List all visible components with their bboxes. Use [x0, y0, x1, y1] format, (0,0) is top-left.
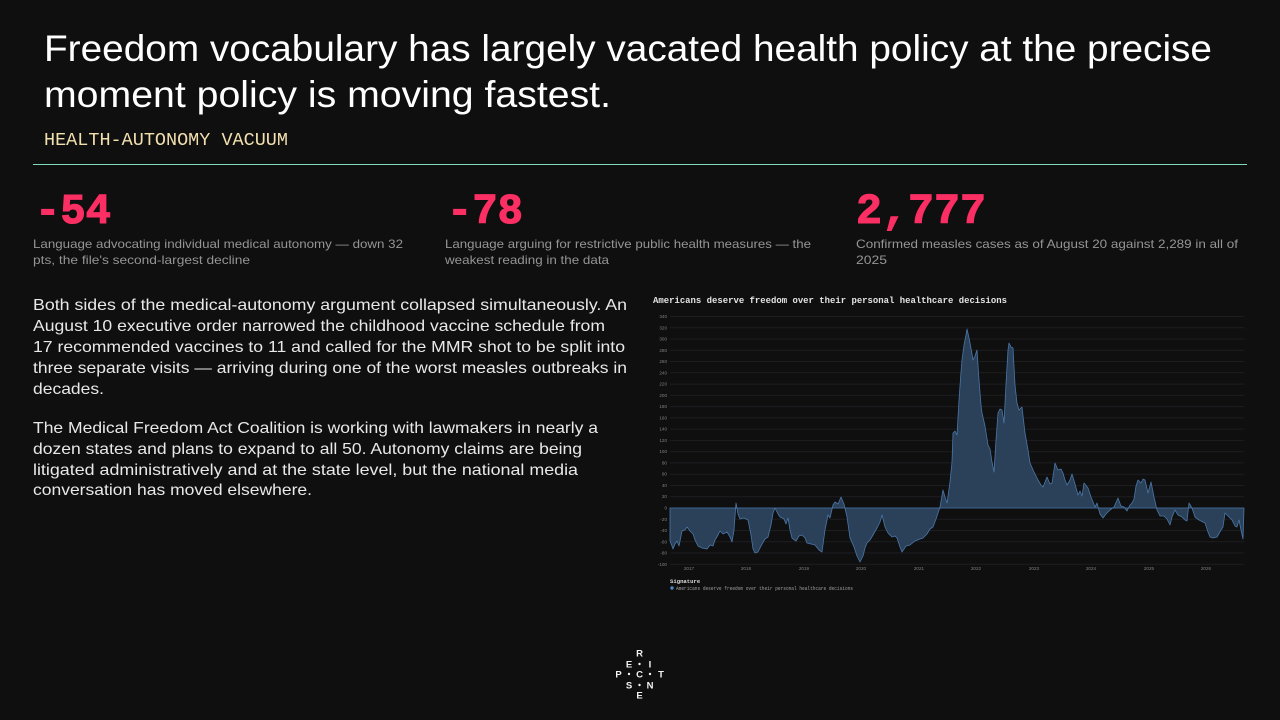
stat: -78: Language arguing for restrictive public health measures — the: [445, 237, 811, 251]
x axis labels: 2022: [971, 566, 982, 571]
y axis labels: 80: [662, 460, 667, 465]
stat: 2,777: [856, 187, 1239, 267]
stat: -78: [444, 187, 811, 267]
y axis labels: 40: [662, 483, 667, 488]
body paragraph 1: 17 recommended vaccines to 11 and called for the MMR shot to be split into: [33, 339, 625, 356]
logo: Precise: P: [615, 670, 622, 680]
body paragraph 2: litigated administratively and at the state level, but the national media: [33, 462, 578, 479]
logo: Precise: T: [658, 670, 664, 680]
logo: Precise: I: [649, 660, 651, 670]
stat: 2,777: Confirmed measles cases as of August 20 against 2,289 in all of: [856, 237, 1239, 251]
body paragraph 2: conversation has moved elsewhere.: [33, 482, 312, 499]
y axis labels: -60: [660, 539, 667, 544]
y axis labels: -100: [658, 562, 667, 567]
x axis labels: 2021: [914, 566, 925, 571]
body paragraph 2: dozen states and plans to expand to all 50. Autonomy claims are being: [33, 441, 582, 458]
logo: Precise: C: [636, 670, 643, 680]
y axis labels: 60: [662, 472, 667, 477]
body paragraph 2: The Medical Freedom Act Coalition is working with lawmakers in nearly a: [33, 420, 598, 437]
chart: signature over time: [653, 296, 1244, 592]
y axis labels: -20: [660, 517, 667, 522]
x axis labels: 2026: [1201, 566, 1212, 571]
stat: 2,777: 2025: [856, 253, 887, 267]
subtitle: HEALTH-AUTONOMY VACUUM: [44, 130, 288, 151]
title: Freedom vocabulary has largely vacated health policy at the precise: [44, 27, 1212, 69]
stat: -54: Language advocating individual medical autonomy — down 32: [33, 237, 403, 251]
logo: Precise: E: [626, 660, 632, 670]
y axis labels: 180: [659, 404, 667, 409]
body paragraph 1: three separate visits — arriving during one of the worst measles outbreaks in: [33, 360, 627, 377]
logo: Precise: [615, 648, 664, 702]
stat: -54: pts, the file's second-largest decline: [33, 253, 250, 267]
y axis labels: 0: [664, 506, 667, 510]
chart legend: Signature: [670, 578, 701, 585]
stat: -78: weakest reading in the data: [444, 253, 609, 267]
y axis labels: -80: [660, 550, 667, 556]
chart legend: [670, 578, 853, 592]
logo: Precise: R: [636, 648, 643, 660]
x axis labels: [684, 566, 1212, 571]
x axis labels: 2025: [1144, 566, 1155, 571]
y axis labels: 20: [662, 494, 667, 499]
y axis labels: 120: [659, 438, 667, 443]
body paragraph 1: decades.: [33, 381, 104, 398]
x axis labels: 2023: [1029, 566, 1040, 571]
stat: -78: -78: [447, 187, 523, 236]
y axis labels: 140: [659, 427, 667, 432]
chart legend: Americans deserve freedom over their personal healthcare decisions: [676, 586, 853, 592]
y axis labels: [658, 314, 667, 567]
logo: Precise: S: [626, 680, 632, 692]
stat: -54: -54: [35, 187, 111, 236]
logo: Precise: E: [636, 690, 643, 702]
body paragraph 1: [33, 297, 627, 398]
y axis labels: 300: [659, 336, 667, 342]
title: moment policy is moving fastest.: [44, 73, 611, 115]
stat: 2,777: 2,777: [856, 187, 986, 236]
area series: [670, 329, 1244, 562]
title: [44, 27, 1212, 115]
chart title: Americans deserve freedom over their personal healthcare decisions: [653, 296, 1007, 306]
x axis labels: 2020: [856, 566, 867, 571]
y axis labels: 160: [659, 415, 667, 420]
y axis labels: -40: [660, 528, 667, 533]
x axis labels: 2019: [799, 566, 810, 571]
y axis labels: 200: [659, 393, 667, 398]
x axis labels: 2024: [1086, 566, 1097, 571]
y axis labels: 340: [659, 314, 667, 319]
y axis labels: 220: [659, 382, 667, 387]
y axis labels: 260: [659, 359, 667, 364]
body paragraph 1: August 10 executive order narrowed the childhood vaccine schedule from: [33, 318, 605, 335]
stat: -54: [33, 187, 403, 267]
logo: Precise: N: [647, 680, 654, 692]
body paragraph 2: [33, 420, 598, 499]
y axis labels: 240: [659, 370, 667, 375]
x axis labels: 2017: [684, 566, 695, 571]
body paragraph 1: Both sides of the medical-autonomy argument collapsed simultaneously. An: [33, 297, 627, 314]
x axis labels: 2018: [741, 566, 752, 571]
y axis labels: 280: [659, 348, 667, 353]
y axis labels: 320: [659, 325, 667, 330]
y axis labels: 100: [659, 449, 667, 454]
